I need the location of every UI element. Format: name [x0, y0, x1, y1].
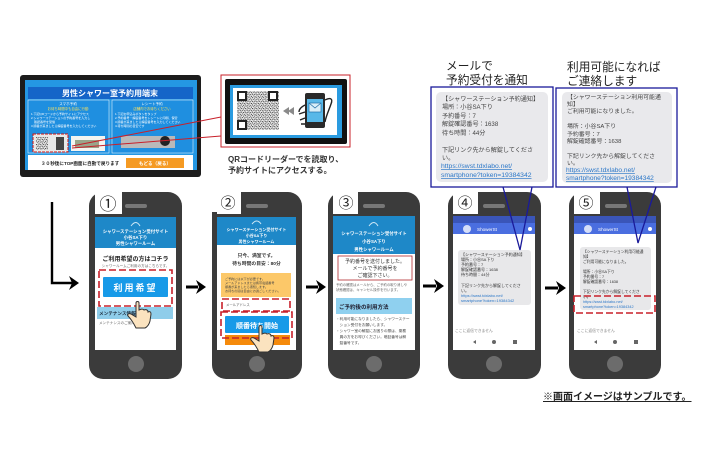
panel: smartphone reservation: 2.シャワーステーションの予約番号を入力し [31, 115, 90, 120]
waiting time text [232, 252, 281, 267]
message bubble [458, 250, 531, 305]
maintenance bar: メンテナンスのご案内 [99, 320, 135, 325]
android nav buttons [473, 340, 517, 344]
icon: hand holding phone with envelope [299, 93, 332, 128]
heading: availability notice: ご連絡します [567, 74, 637, 88]
phone 1: ご利用希望の方はコチラ [102, 255, 169, 263]
message enlargement: reservation notice [431, 87, 553, 187]
bottom notice and back button: もどる（戻る） [139, 160, 171, 167]
button: 順番待ち開始: 順番待ち開始 [236, 321, 278, 330]
arrow: step 1 to 2 [186, 280, 206, 294]
icon: tapping hand [128, 302, 151, 328]
usage notes panel: ション受付をお願いします。 [336, 322, 387, 327]
step number 3: ③ [338, 195, 354, 212]
message bubble: 下記リンク先から解錠してくださ [461, 282, 521, 288]
QR reader caption: 予約サイトにアクセスする。 [228, 165, 332, 175]
panel: smartphone reservation: 1.下記QRコードから予約サイトにアクセス [31, 111, 89, 116]
panel: smartphone reservation: 3.順番が来ましたら解錠番号を入力してください [31, 123, 96, 128]
step number 1: ① [100, 195, 116, 214]
message bubble: 下記リンク先から解錠してくださ [583, 289, 640, 294]
phone 4 [448, 192, 541, 379]
QR reader caption: QRコードリーダーでを読取り、 [228, 154, 343, 164]
message enlargement: reservation notice: 解錠確認番号：1638 [442, 120, 499, 128]
arrow: step 3 to 4 [423, 279, 444, 293]
step number 4 [453, 192, 478, 214]
site header [217, 217, 296, 245]
panel: receipt reservation: レシート予約 [141, 101, 163, 106]
site header: シャワーステーション受付サイト [103, 228, 168, 235]
site header: シャワーステーション受付サイト [341, 230, 407, 237]
terminal title band: 男性シャワー室予約用端末 [62, 88, 158, 98]
message bubble: 予約番号：7 [583, 274, 604, 279]
message bubble [580, 247, 651, 310]
orange bar [225, 335, 290, 345]
site header [95, 217, 176, 248]
heading: mail notice [446, 60, 528, 87]
usage notes panel: 錠番号です。 [336, 340, 361, 345]
heading: availability notice [567, 60, 661, 88]
cancellation note [336, 282, 408, 292]
panel: receipt reservation: 4.待ち時間の目安です [115, 123, 145, 128]
mail address field with dashed highlight [222, 299, 290, 311]
usage notes panel: ・利用可能になりましたら、シャワーステー [336, 316, 410, 321]
panel: receipt reservation: 1.下記お申込みボタンをタップ [115, 111, 157, 116]
phone 5 [569, 192, 661, 379]
reservation confirmation box: 予約番号を送付しました。 [345, 258, 405, 265]
maintenance bar: メンテナンス情報 [99, 310, 136, 317]
reservation confirmation box [338, 256, 412, 280]
arrow: step 4 to 5 [545, 281, 566, 295]
orange notice box: ご予約には以下が必要です。 [225, 276, 265, 281]
red dashed highlight [221, 312, 292, 338]
panel: receipt reservation: 店舗内でお待ちください [133, 106, 171, 111]
message bubble: 【シャワーステーション利用可能通 [583, 249, 644, 254]
message enlargement: reservation notice: 【シャワーステーション予約通知】 [442, 95, 539, 103]
cancellation note: 状態確認は、キャンセル操作を行います。 [336, 287, 400, 292]
icon: double chevron [283, 107, 294, 115]
message enlargement: reservation notice: 待ち時間：44分 [442, 129, 485, 137]
usage notes panel: ご予約後の利用方法 [339, 303, 389, 311]
android nav buttons [594, 340, 638, 344]
phone 1 [89, 192, 182, 379]
panel: receipt reservation: 2.予約番号・解錠番号をレシートに印刷、保管 [115, 115, 178, 120]
message input hint: ここに返信できません [455, 328, 493, 333]
orange notice box: 順番が来ましたら通知します。 [225, 284, 268, 289]
bottom notice and back button [28, 155, 193, 170]
callout pointer: phone 5 [627, 187, 656, 243]
site header: 男性シャワールーム [354, 246, 394, 253]
usage notes panel [336, 298, 412, 345]
message bubble: smartphone?token=19384342 [461, 298, 515, 303]
callout: QR code and phone [221, 75, 350, 147]
red dashed highlight [574, 296, 655, 313]
orange notice box: メールアドレスまたは携帯電話番号 [225, 280, 274, 285]
monitor: reservation terminal [20, 75, 201, 177]
message enlargement: availability notice [556, 88, 677, 187]
panel: smartphone reservation: 確認番号を受信 [31, 119, 55, 124]
step number 2 [212, 192, 241, 214]
button: 利用希望 [103, 277, 168, 297]
message enlargement: availability notice: 場所：小谷SA下り [567, 122, 616, 130]
arrow: monitor to phone 1 [52, 202, 79, 290]
maintenance bar [97, 307, 173, 325]
button: 順番待ち開始 [225, 316, 289, 333]
reservation confirmation box: メールで予約番号を [352, 265, 398, 272]
step number 3 [333, 192, 358, 214]
message enlargement: availability notice: 解錠確認番号：1638 [567, 137, 622, 145]
heading: availability notice: 利用可能になれば [567, 60, 661, 74]
waiting time text: 待ち時間の目安：80分 [232, 260, 281, 267]
red dashed highlight [99, 270, 172, 306]
QR reader caption [228, 154, 343, 175]
callout connector lines [72, 117, 221, 148]
messaging app bar [574, 216, 656, 234]
message bubble: 解錠確認番号：1638 [583, 279, 618, 284]
panel: smartphone reservation: スマホ予約 [59, 101, 77, 106]
reservation confirmation box: ご確認下さい。 [357, 272, 393, 279]
message enlargement: availability notice: 【シャワーステーション利用可能通 [567, 93, 661, 101]
message input hint: ここに返信できません [577, 328, 615, 333]
terminal title band [28, 87, 193, 99]
step number 2: ② [220, 195, 236, 212]
messaging app bar [453, 216, 535, 234]
message bubble: https://swst.tdxlabo.net/ [583, 300, 624, 304]
messaging app bar: ShowerSt [477, 227, 498, 232]
waiting time text: 只今、満室です。 [238, 252, 275, 259]
message bubble: 【シャワーステーション予約通知】 [461, 251, 525, 257]
message bubble: 場所：小谷SA下り [583, 269, 615, 274]
message enlargement: reservation notice: smartphone?token=19384342 [441, 172, 532, 179]
site header: 小谷SA下り [246, 232, 267, 238]
heading: mail notice: 予約受付を通知 [446, 73, 528, 87]
message bubble: い。 [461, 288, 469, 293]
usage notes panel: 員の方をお呼びください。暗証番号は解 [336, 334, 406, 339]
phone 2 [212, 192, 302, 379]
message enlargement: reservation notice: 下記リンク先から解錠してくださ [442, 146, 533, 154]
cancellation note: 予約の確認はメールから、ご予約の取り消しや [336, 282, 408, 287]
message enlargement: reservation notice: 場所：小谷SA下り [442, 103, 493, 111]
message enlargement: availability notice: い。 [567, 160, 579, 167]
message bubble: 知】 [583, 254, 591, 259]
message bubble: 解錠確認番号：1638 [461, 266, 499, 272]
site header: 小谷SA下り [362, 238, 386, 245]
phone 3 [328, 192, 420, 379]
message enlargement: availability notice: https://swst.tdxlabo.net/ [566, 167, 635, 174]
message bubble: 予約番号：7 [461, 261, 484, 267]
message bubble: ご利用可能になりました。 [583, 259, 629, 264]
orange notice box [221, 273, 291, 297]
panel: receipt reservation [112, 100, 193, 153]
arrow: step 2 to 3 [306, 280, 326, 294]
usage notes panel: ・シャワー室の解錠にお困りの際は、乗務 [336, 328, 406, 333]
message bubble: い。 [583, 295, 591, 299]
message enlargement: availability notice: 知】 [567, 100, 579, 108]
site header: シャワーステーション受付サイト [227, 226, 286, 232]
site header [333, 216, 415, 254]
message enlargement: availability notice: 下記リンク先から解錠してくださ [567, 152, 655, 160]
site header: 男性シャワールーム [239, 238, 274, 244]
message bubble: 場所：小谷SA下り [461, 256, 494, 262]
message enlargement: availability notice: 予約番号：7 [567, 130, 600, 138]
message bubble: https://swst.tdxlabo.net/ [461, 293, 504, 298]
icon: QR code [237, 91, 279, 130]
callout pointer: phone 4 [503, 187, 532, 250]
icon: tapping hand [251, 326, 274, 352]
site header: 男性シャワールーム [116, 240, 156, 247]
message enlargement: availability notice: smartphone?token=19384342 [566, 175, 654, 182]
heading: mail notice: メールで [446, 60, 493, 73]
sample image note: ※画面イメージはサンプルです。 [543, 391, 692, 403]
message enlargement: reservation notice: https://swst.tdxlabo.net/ [441, 163, 512, 170]
panel: smartphone reservation: お待ち時間中も自由に行動 [48, 106, 89, 111]
message enlargement: reservation notice: 予約番号：7 [442, 112, 476, 120]
button: 利用希望: 利用希望 [113, 282, 158, 293]
step number 1 [95, 192, 122, 214]
messaging app bar: ShowerSt [598, 227, 619, 232]
mail address field with dashed highlight: メールアドレス [226, 302, 250, 307]
step number 5 [574, 192, 600, 214]
site header: 小谷SA下り [124, 234, 147, 241]
message enlargement: availability notice: ご利用可能になりました。 [567, 107, 638, 115]
message enlargement: reservation notice: い。 [442, 155, 454, 162]
panel: receipt reservation: 3.順番が来ましたら解錠番号を入力してください [115, 119, 180, 124]
phone 1: シャワールームご利用の方はこちらです。 [102, 263, 169, 268]
step number 4: ④ [457, 195, 473, 212]
message bubble: smartphone?token=19384342 [583, 305, 634, 309]
step number 5: ⑤ [578, 195, 594, 212]
panel: smartphone reservation [28, 100, 109, 153]
message bubble: 待ち時間：44分 [461, 271, 489, 277]
bottom notice and back button: ３０秒後にTOP画面に自動で戻ります [41, 160, 120, 167]
orange notice box: お待ちの間は自由にお過ごしください。 [225, 288, 281, 293]
